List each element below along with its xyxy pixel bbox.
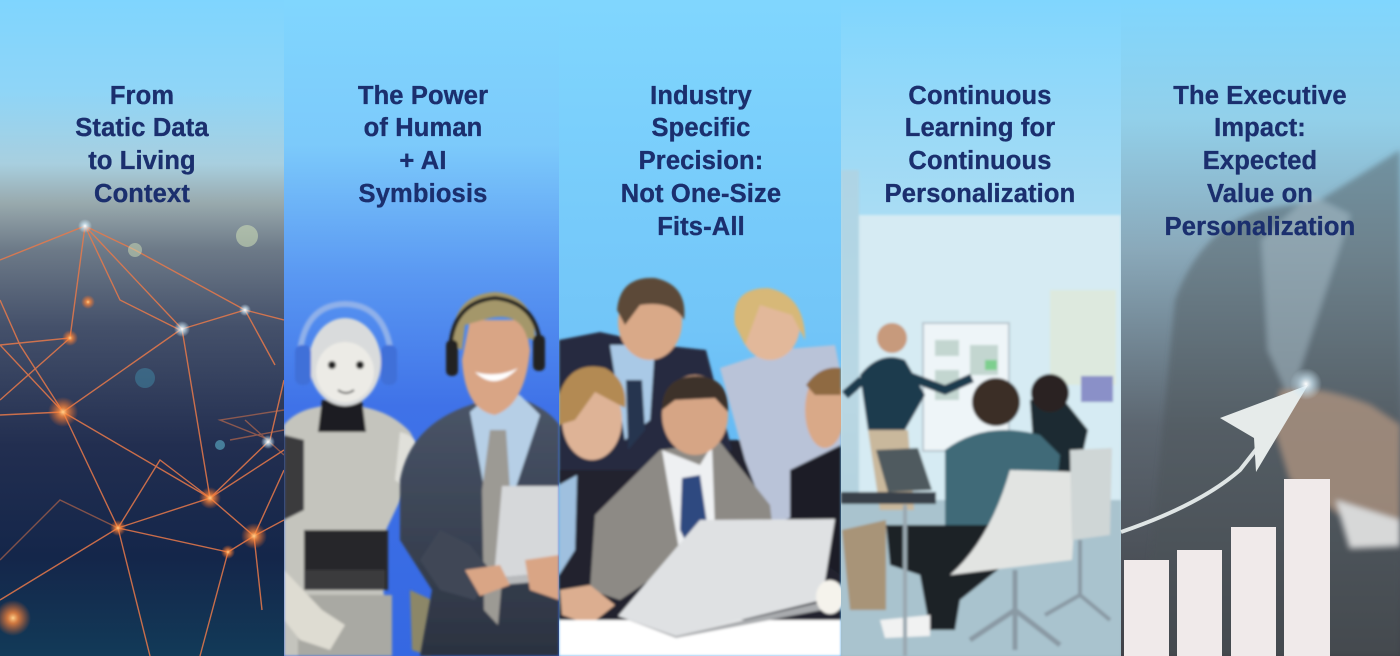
heading: column four xyxy=(885,82,1075,208)
heading: column four: Continuous xyxy=(908,82,1052,110)
panel: human + AI symbiosis xyxy=(284,84,559,656)
heading: column two: + AI xyxy=(399,147,447,175)
icon: business team around a laptop xyxy=(559,278,845,656)
heading: column five: Personalization xyxy=(1165,213,1355,241)
heading: column five: Impact: xyxy=(1214,114,1306,142)
panel: industry specific precision xyxy=(559,84,841,656)
heading: column five xyxy=(1165,82,1355,241)
heading: column three: Fits-All xyxy=(657,213,745,241)
heading: column two: The Power xyxy=(358,82,488,110)
heading: column three: Specific xyxy=(652,114,750,142)
heading: column three: Industry xyxy=(650,82,753,110)
heading: column one: to Living xyxy=(88,147,196,175)
icon: executive in a suit xyxy=(1150,150,1400,656)
heading: column two xyxy=(358,82,488,208)
heading: column four: Continuous xyxy=(908,147,1052,175)
icons: glowing network nodes xyxy=(0,219,275,636)
heading: column four: Personalization xyxy=(885,180,1075,208)
heading: column three xyxy=(621,82,781,241)
heading: column five: Expected xyxy=(1203,147,1317,175)
heading: column two: of Human xyxy=(364,114,482,142)
heading: column four: Learning for xyxy=(905,114,1055,142)
panel: continuous learning xyxy=(841,0,1121,656)
heading: column one: Context xyxy=(94,180,190,208)
heading: column five: Value on xyxy=(1207,180,1313,208)
panel: static data to living context xyxy=(0,0,284,656)
icon: rising arrow xyxy=(1121,368,1322,532)
panel: executive impact xyxy=(1121,0,1400,656)
icon: man with headset and laptop xyxy=(400,292,559,656)
heading: column one xyxy=(75,82,209,208)
heading: column one: Static Data xyxy=(75,114,209,142)
icon: robot xyxy=(284,304,432,656)
chart: network of orange lines xyxy=(0,226,284,656)
heading: column three: Not One-Size xyxy=(621,180,781,208)
heading: column five: The Executive xyxy=(1173,82,1347,110)
heading: column three: Precision: xyxy=(639,147,763,175)
heading: column two: Symbiosis xyxy=(359,180,487,208)
heading: column one: From xyxy=(110,82,174,110)
bar chart: growth bars xyxy=(1124,479,1330,656)
icon: meeting room scene xyxy=(841,170,1121,656)
